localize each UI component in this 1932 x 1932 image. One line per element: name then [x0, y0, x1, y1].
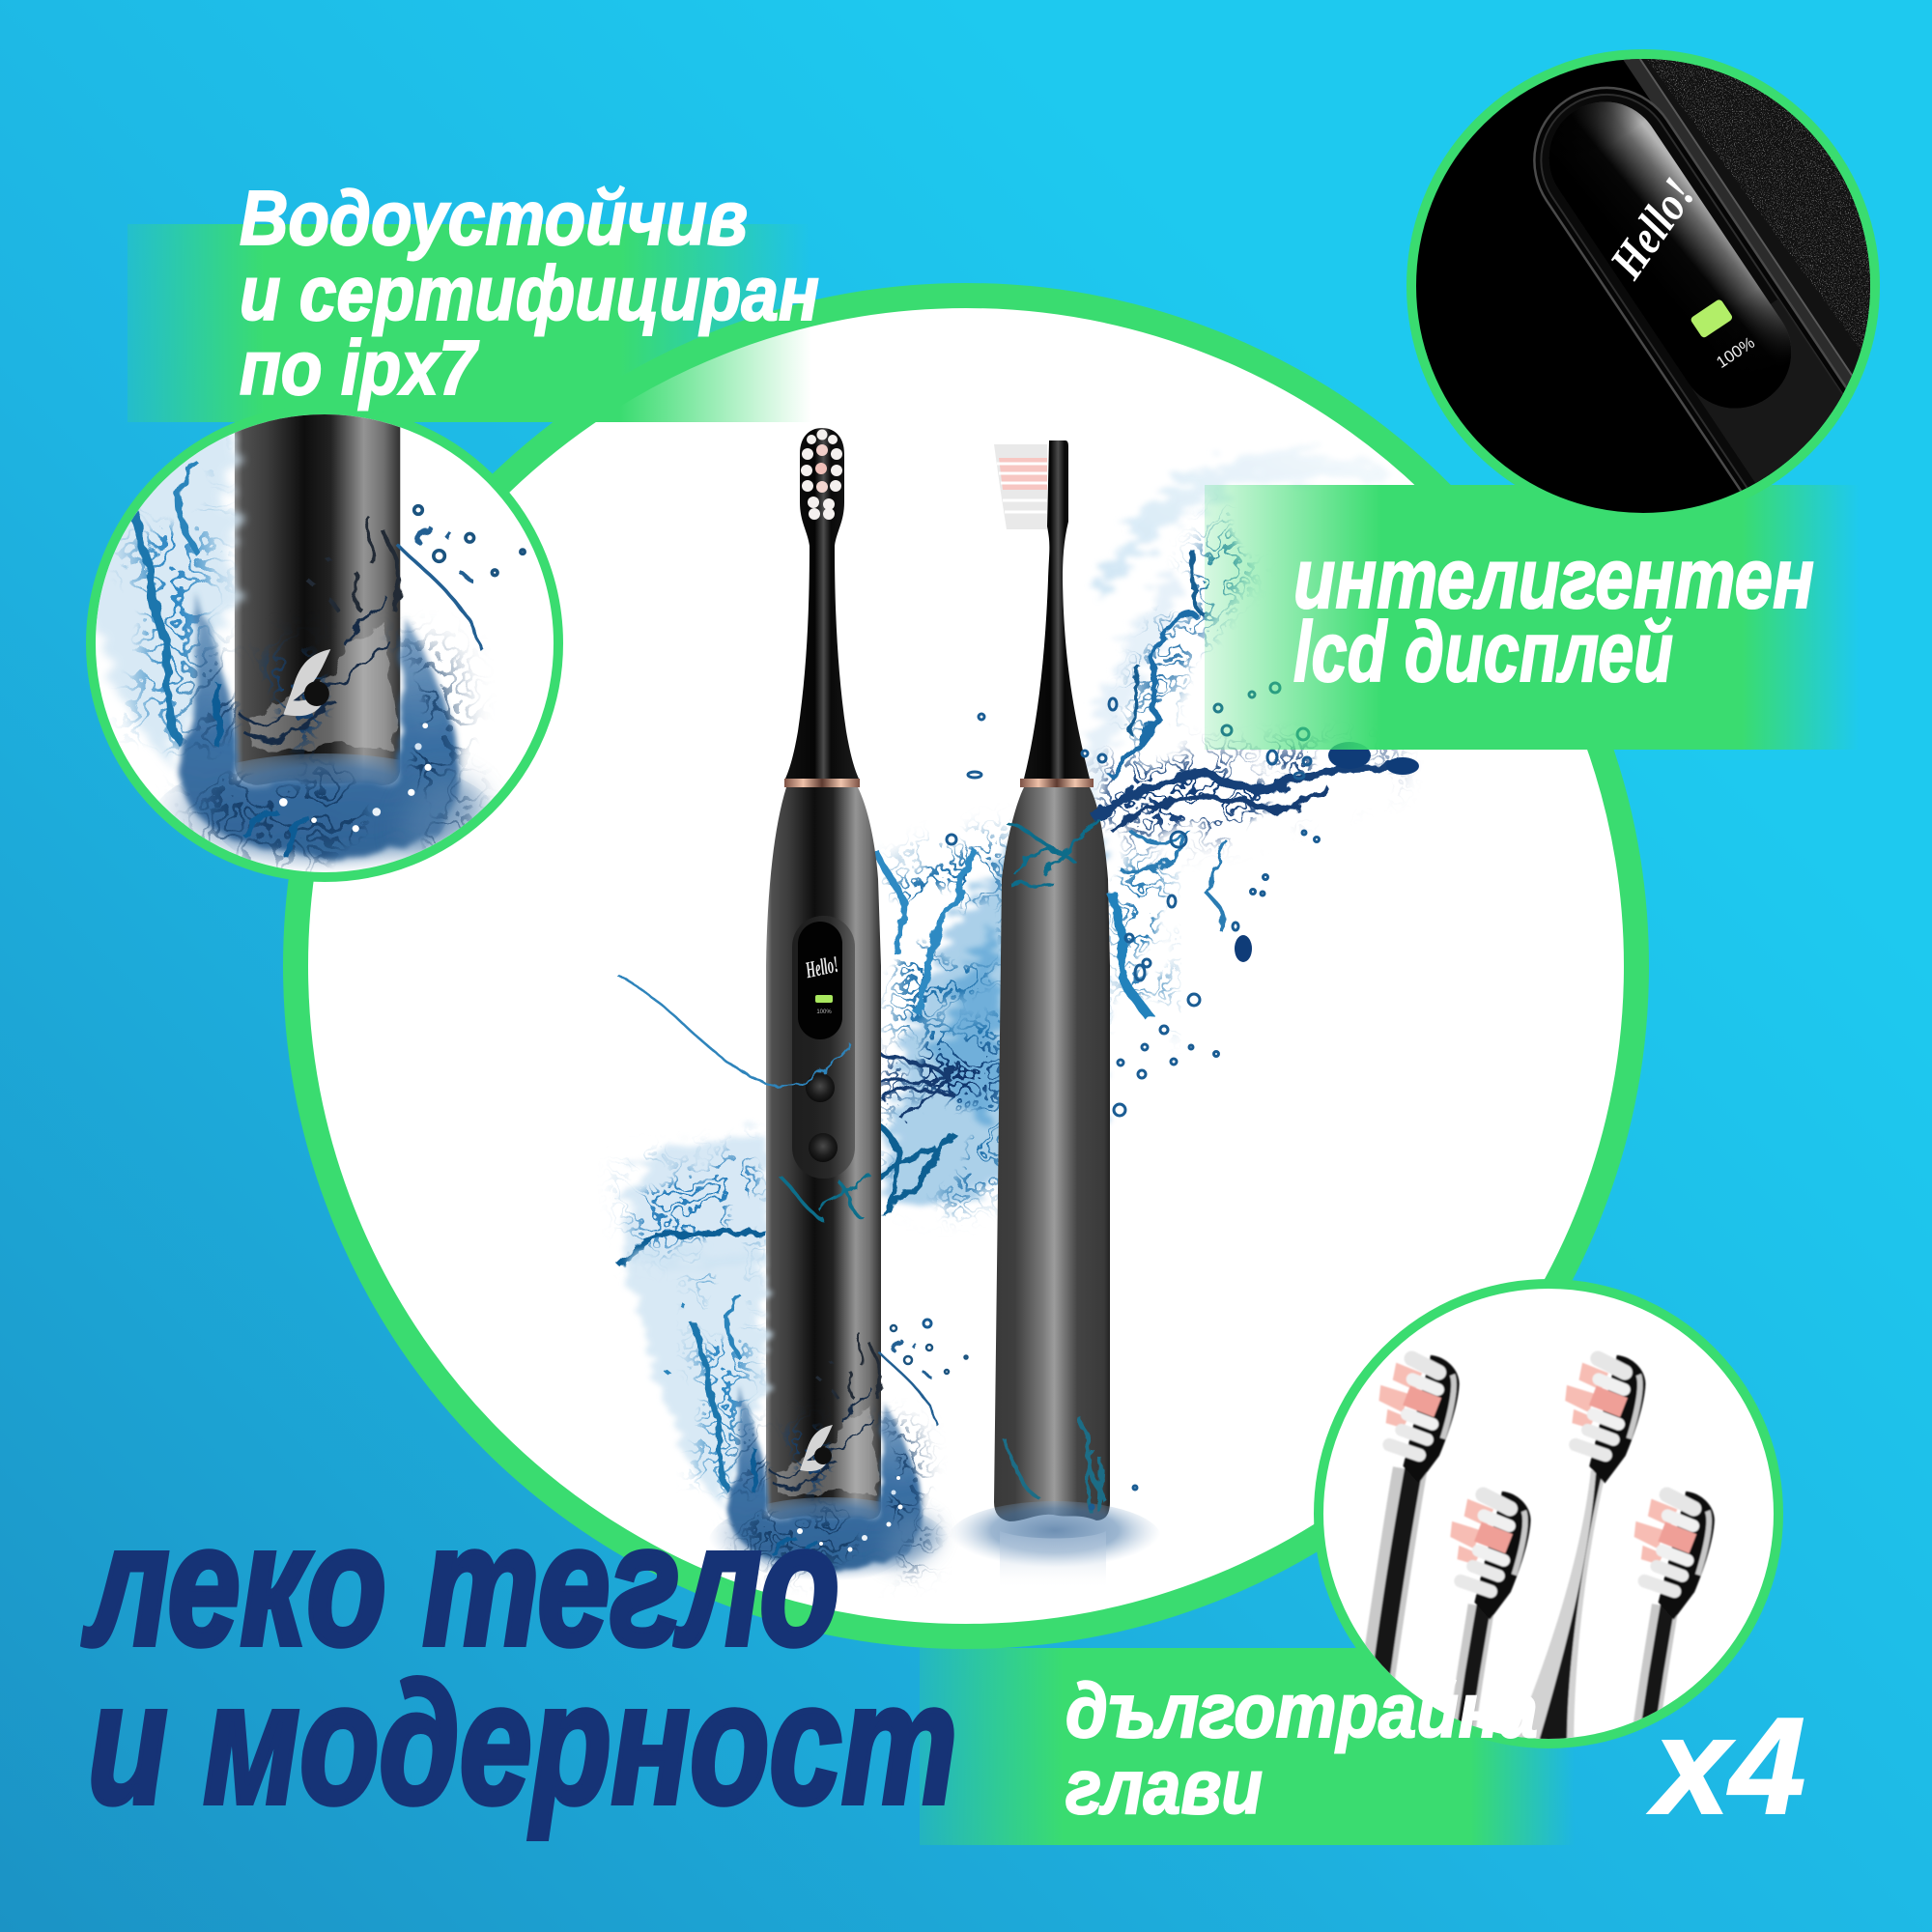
heading: lcd [1293, 530, 1814, 699]
circle: lcd close-up [1406, 49, 1880, 513]
water splash: washes behind toothbrushes [618, 451, 1391, 1265]
strands behind [874, 850, 976, 1014]
head 3 [1512, 1355, 1645, 1746]
head 2 [1450, 1492, 1531, 1754]
percent: 100% [1713, 333, 1758, 372]
water splash: strands and droplets over toothbrushes [618, 551, 1419, 1590]
banner: waterproof [128, 224, 811, 422]
head 1 [1374, 1355, 1460, 1704]
heading: heads [1065, 1667, 1538, 1830]
head and neck [785, 428, 859, 779]
base splash brush 2 [949, 1420, 1161, 1589]
water veins [894, 831, 1005, 1206]
circle: replacement heads [1319, 1284, 1778, 1754]
heading: heads: глави [1065, 1744, 1263, 1830]
head 4 [1634, 1492, 1715, 1754]
battery [815, 995, 833, 1003]
thin left filaments [618, 976, 850, 1087]
LCD screen [798, 922, 842, 1039]
collar [784, 779, 860, 787]
strand right of side handle [1113, 894, 1151, 1019]
teal splash over handles [1005, 816, 1096, 884]
droplets [923, 683, 1320, 1509]
toothbrush: side view [994, 440, 1110, 1521]
control pill [792, 916, 855, 1179]
percent: 100% [816, 1009, 832, 1015]
handle [994, 787, 1110, 1521]
handle edge [1623, 59, 1851, 390]
heading: waterproof: Водоустойчив [240, 175, 748, 261]
toothbrush: front view with LCD [766, 428, 881, 1520]
enlarged handle [96, 414, 526, 871]
base splash brush 1 [628, 1249, 968, 1590]
heading: waterproof [240, 175, 819, 411]
hello text: Hello! [803, 952, 840, 983]
main headline [82, 1489, 957, 1839]
navy blob [1235, 742, 1419, 962]
hello: Hello! [1599, 168, 1705, 288]
main headline: леко тегло [82, 1489, 839, 1681]
rising strand [1111, 613, 1198, 778]
bristles [801, 429, 842, 520]
navy stream to the right [1092, 763, 1412, 816]
bristles [994, 444, 1047, 529]
buttons [806, 1073, 838, 1162]
quantity x4: x4 [1647, 1690, 1805, 1843]
screen [1551, 102, 1791, 394]
heading: waterproof: и сертифициран [240, 250, 819, 336]
circle: waterproof close-up [86, 414, 563, 882]
heading: heads: дълготрайна [1065, 1667, 1538, 1753]
heading: lcd: lcd дисплей [1293, 604, 1673, 699]
battery icon [1690, 299, 1732, 338]
banner: lcd display [1205, 485, 1860, 750]
main headline: и модерност [88, 1647, 957, 1839]
handle [766, 787, 881, 1520]
head and neck [1024, 440, 1090, 779]
black textured background [1642, 59, 1870, 379]
main circle [296, 296, 1636, 1636]
heading: waterproof: по ipx7 [240, 325, 479, 411]
banner: long-lasting heads [920, 1648, 1575, 1845]
collar [1020, 779, 1094, 787]
heading: lcd: интелигентен [1293, 530, 1814, 626]
bezel [1533, 87, 1847, 492]
